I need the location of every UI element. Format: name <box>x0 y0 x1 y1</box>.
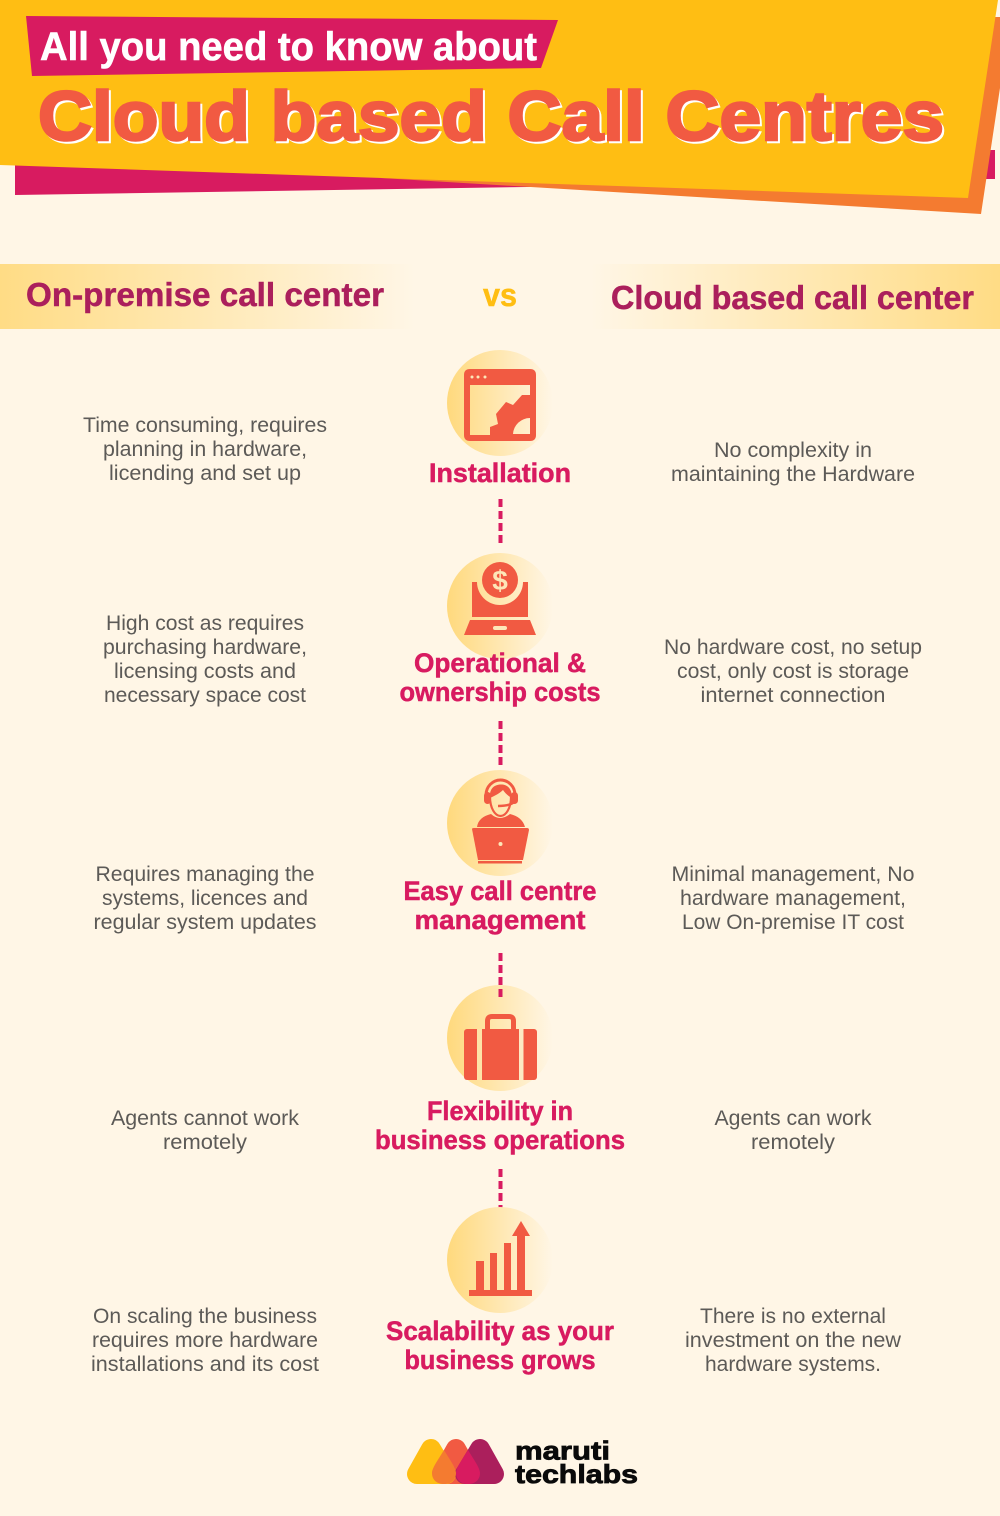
row 4: flexibility <box>111 985 872 1155</box>
on-premise text: Time consuming, requires <box>83 414 327 437</box>
logo wordmark: maruti <box>515 1436 610 1466</box>
heading: operational costs: Operational & <box>414 648 586 678</box>
heading: installation: Installation <box>429 458 571 488</box>
row 1: installation <box>83 350 915 488</box>
on-premise text: remotely <box>163 1131 248 1154</box>
comparison header <box>0 264 1000 329</box>
subtitle ribbon <box>26 16 558 76</box>
icon: installation window with gear <box>447 350 553 456</box>
logo wordmark: techlabs <box>515 1459 638 1489</box>
on-premise text: regular system updates <box>94 911 316 934</box>
cloud text: investment on the new <box>685 1329 902 1352</box>
cloud text <box>664 636 922 707</box>
heading: management <box>404 876 596 935</box>
cloud text <box>685 1305 902 1376</box>
cloud text: maintaining the Hardware <box>671 463 915 486</box>
on-premise text <box>83 414 327 485</box>
cloud text: No complexity in <box>714 439 872 462</box>
on-premise text: High cost as requires <box>106 612 304 635</box>
cloud text: internet connection <box>700 684 886 707</box>
on-premise text: systems, licences and <box>102 887 308 910</box>
on-premise text <box>103 612 307 707</box>
row 5: scalability <box>91 1207 902 1376</box>
cloud text: Agents can work <box>714 1107 872 1130</box>
heading: management: management <box>414 905 586 935</box>
cloud text: hardware systems. <box>705 1353 881 1376</box>
icon: laptop with dollar coin: $ <box>492 565 508 596</box>
heading: scalability: Scalability as your <box>386 1316 614 1346</box>
heading: operational costs: ownership costs <box>400 677 600 707</box>
on-premise text: On scaling the business <box>93 1305 317 1328</box>
subtitle: All you need to know about <box>40 25 537 69</box>
cloud text: Minimal management, No <box>672 863 914 886</box>
title banner <box>0 0 1000 214</box>
vs label: vs <box>483 277 517 313</box>
title: Cloud based Call Centres <box>40 79 946 157</box>
row 2: operational costs <box>103 553 922 707</box>
on-premise text: installations and its cost <box>91 1353 319 1376</box>
on-premise text: necessary space cost <box>104 684 306 707</box>
on-premise text: Agents cannot work <box>111 1107 300 1130</box>
left column heading: On-premise call center <box>26 276 384 313</box>
on-premise text: planning in hardware, <box>103 438 307 461</box>
icon: suitcase <box>447 985 553 1091</box>
cloud text: cost, only cost is storage <box>677 660 909 683</box>
logo wordmark <box>515 1436 638 1489</box>
cloud text: No hardware cost, no setup <box>664 636 922 659</box>
icon: call centre agent <box>447 770 553 876</box>
icon: growth chart <box>447 1207 553 1313</box>
on-premise text: licensing costs and <box>114 660 296 683</box>
on-premise text <box>94 863 316 934</box>
cloud text: Low On-premise IT cost <box>682 911 904 934</box>
cloud text: remotely <box>751 1131 836 1154</box>
cloud text <box>714 1107 872 1154</box>
title: Cloud based Call Centres <box>38 77 944 155</box>
on-premise text: purchasing hardware, <box>103 636 307 659</box>
heading: scalability <box>386 1316 614 1375</box>
on-premise text: Requires managing the <box>96 863 314 886</box>
heading: management: Easy call centre <box>404 876 596 906</box>
on-premise text: requires more hardware <box>92 1329 318 1352</box>
cloud text: hardware management, <box>680 887 906 910</box>
logo mark <box>417 1449 494 1484</box>
on-premise text <box>91 1305 319 1376</box>
on-premise text <box>111 1107 300 1154</box>
cloud text <box>671 439 915 486</box>
row 3: management <box>94 770 914 935</box>
right column heading: Cloud based call center <box>611 279 974 316</box>
heading: flexibility: business operations <box>375 1125 625 1155</box>
icon: laptop with dollar coin <box>447 553 553 659</box>
heading: flexibility: Flexibility in <box>427 1096 573 1126</box>
cloud text <box>672 863 914 934</box>
on-premise text: licending and set up <box>109 462 301 485</box>
heading: operational costs <box>400 648 600 707</box>
cloud text: There is no external <box>700 1305 886 1328</box>
heading: scalability: business grows <box>404 1345 596 1375</box>
logo: maruti techlabs <box>417 1436 638 1489</box>
heading: flexibility <box>375 1096 625 1155</box>
